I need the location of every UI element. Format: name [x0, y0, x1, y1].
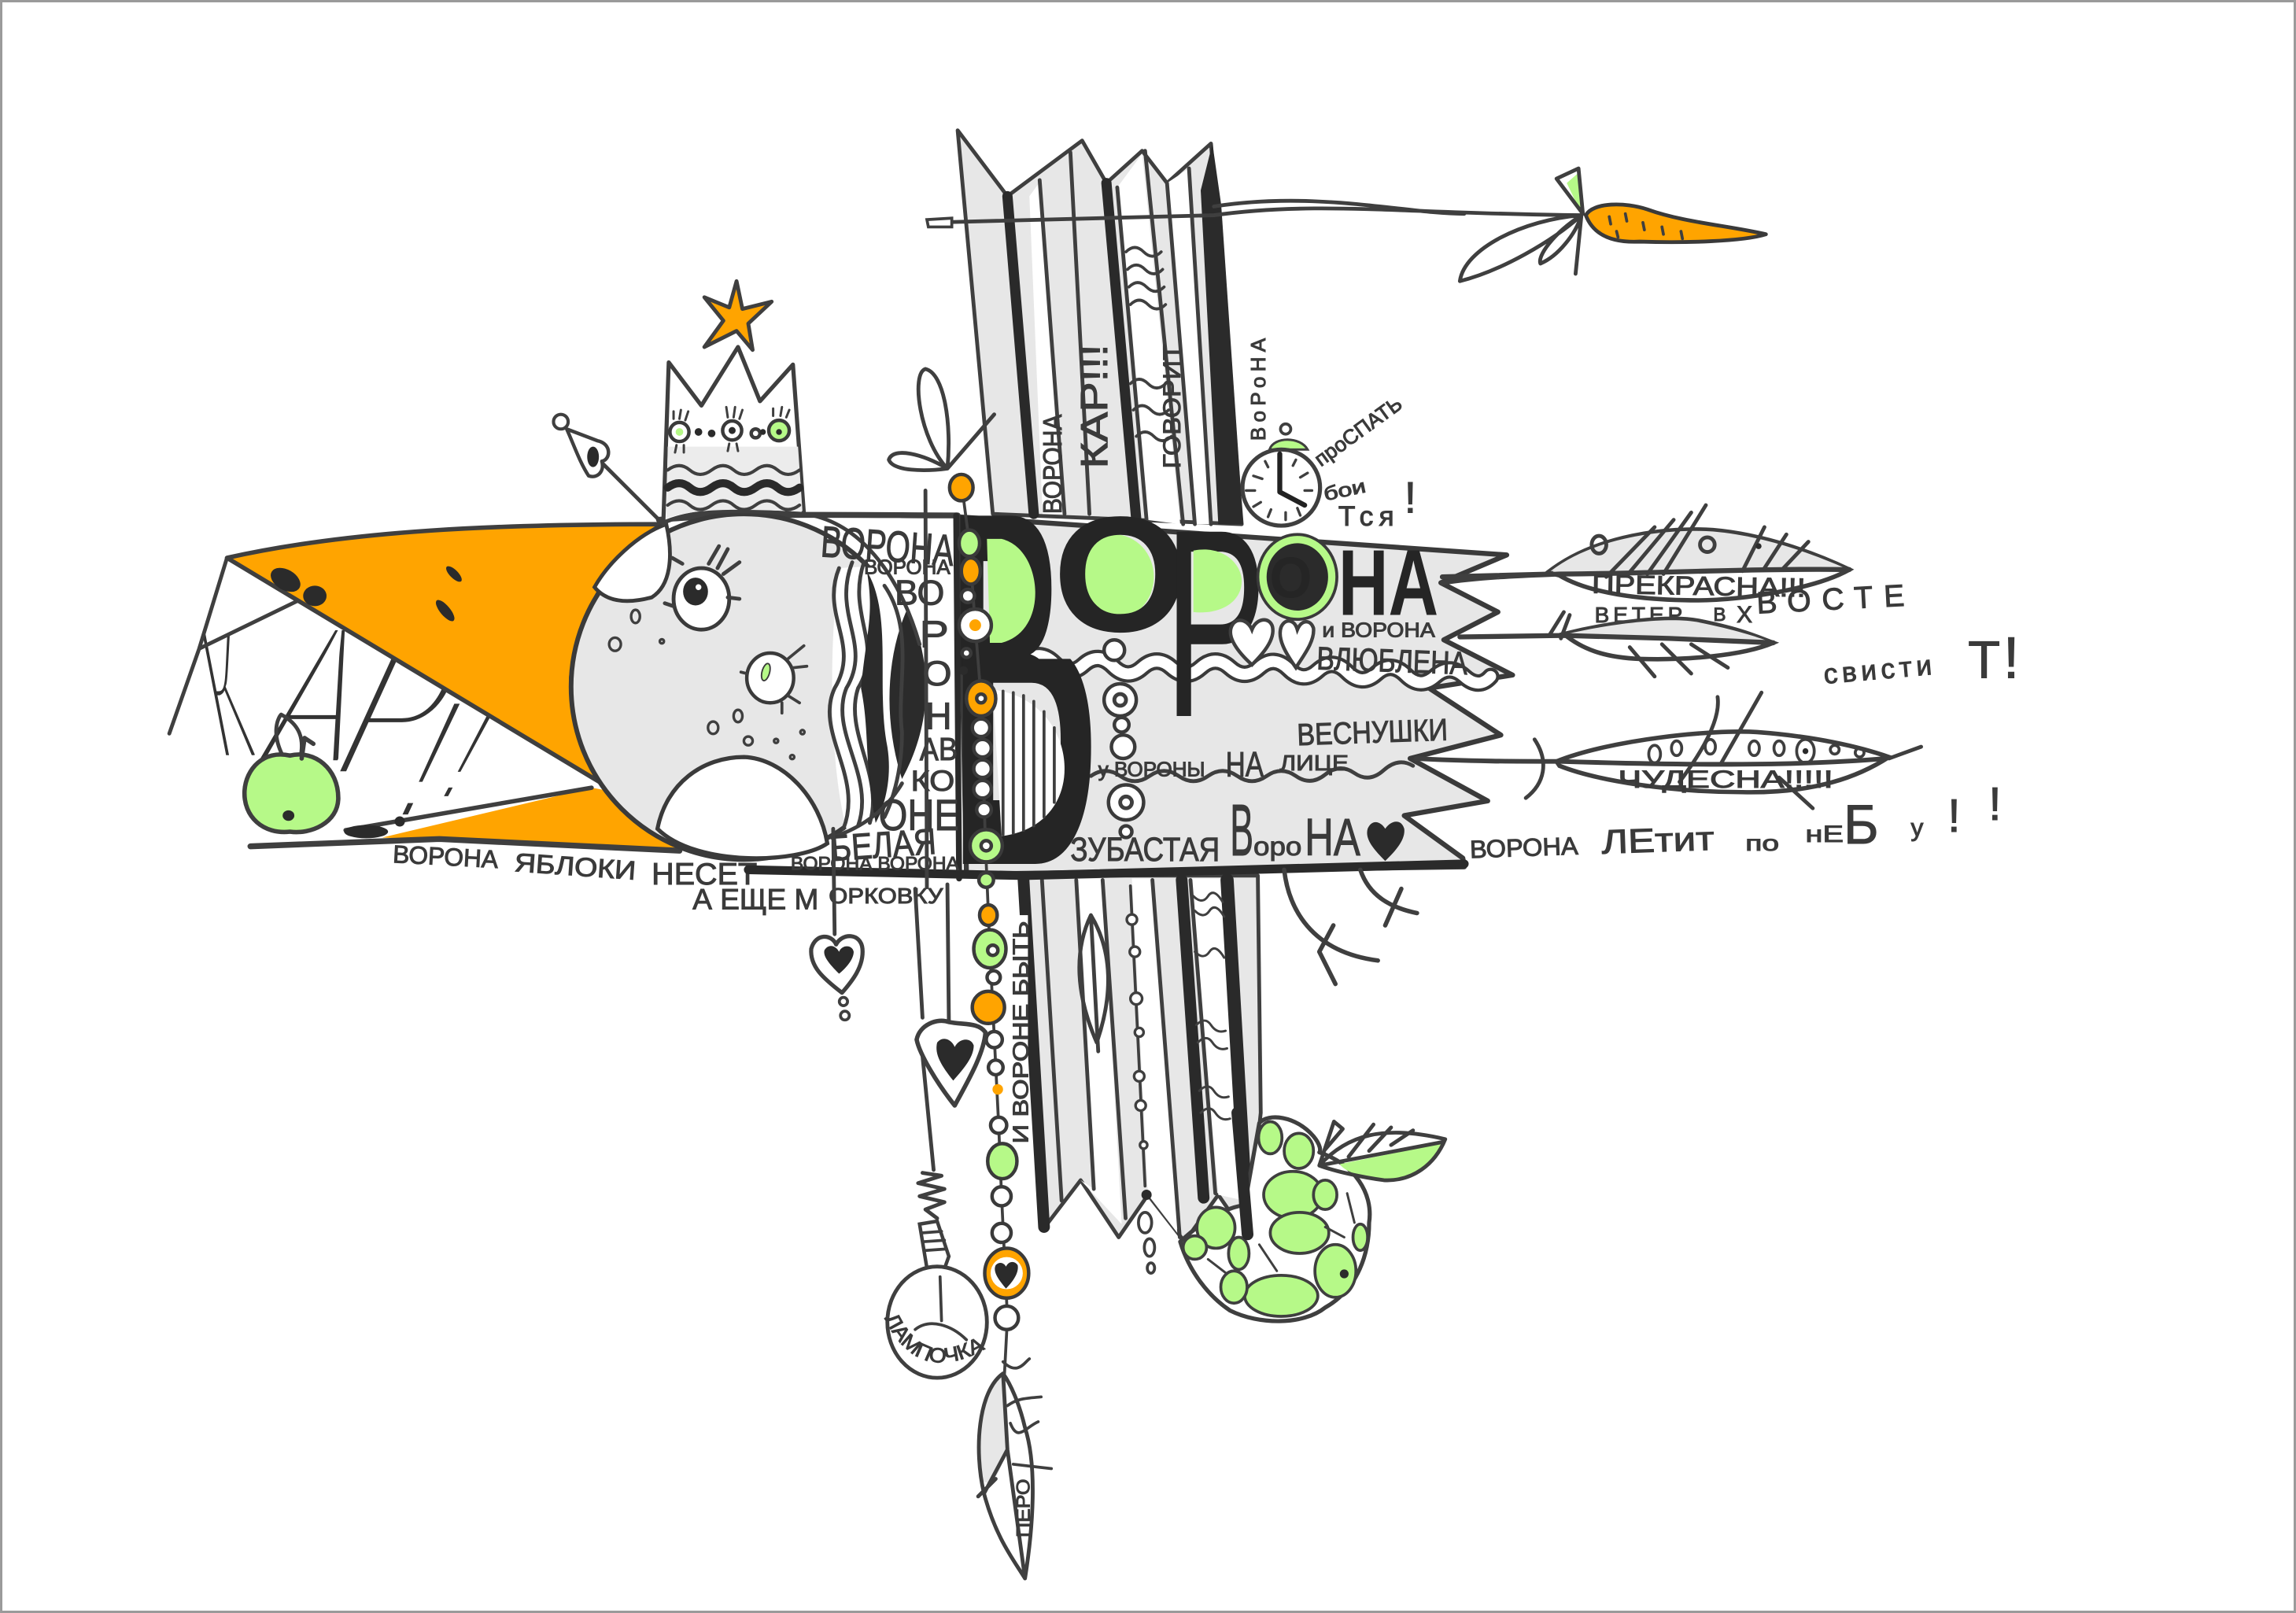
icon: wand with spade: [553, 415, 663, 524]
text: ВОРОНА ЛЕТИТ ПО НЕБУ: по: [1745, 831, 1779, 855]
caption: ВОРОНА ЯБЛОКИ НЕСЕТ: НЕСЕТ: [652, 858, 757, 891]
beak-mouth word КАР: !: [422, 684, 515, 825]
text: ВО: ВО: [895, 574, 944, 613]
icon: hanging heart small: [811, 829, 862, 1020]
text: свистит!: свисти: [1822, 650, 1937, 690]
beads in banner: [1104, 640, 1143, 837]
text: ЧУДЕСНА: ЧУДЕСНА!!!!!: [1618, 765, 1833, 793]
beak-mouth word КАР: Р: [305, 611, 495, 815]
text: ЗУБАСТАЯ ВороНА: [1070, 789, 1360, 871]
text: ВЛЮБЛЕНА: ВЛЮБЛЕНА: [1316, 640, 1468, 681]
letters НА: НА: [1338, 531, 1438, 636]
text: АВ: АВ: [920, 731, 958, 767]
green counter of upper В bowl: [987, 539, 1035, 643]
icon: carrot: [1585, 205, 1766, 242]
text: БЕЛАЯ: БЕЛАЯ: [829, 821, 937, 869]
text: ВОРОНА large: ВОРОНА: [819, 516, 956, 575]
caption: А ЕЩЕ МОРКОВКУ: [692, 883, 943, 916]
chest stacked words: Н: [925, 696, 952, 738]
striped counter of lower В bowl: [993, 689, 1065, 836]
text: у ВОРОНЫ НА ЛИЦЕ: [1098, 745, 1349, 784]
upper beak: [227, 524, 663, 792]
caption: А ЕЩЕ МОРКОВКУ: ОРКОВКУ: [829, 884, 943, 908]
mouth web lines: [169, 558, 301, 733]
icon: two hearts: [1231, 620, 1313, 668]
text: ВОРОНА on feather: ВОРОНА: [1039, 414, 1068, 514]
text: ОНЕ: ОНЕ: [879, 790, 959, 840]
text: ВОРОНА ЛЕТИТ ПО НЕБУ: ВОРОНА: [1469, 832, 1579, 864]
text: ВОРОНА ЛЕТИТ ПО НЕБУ: Б: [1844, 793, 1879, 855]
right feather two: [1460, 612, 1774, 677]
head white patch bottom: [658, 757, 827, 858]
text: КО: КО: [911, 764, 954, 797]
big letter В lower part: В: [949, 326, 1101, 991]
text: ВоРоНА vertical: ВоРоНА: [1246, 334, 1270, 441]
text: ВЕТЕР В ХВОСТЕ: ВЕТЕР: [1595, 603, 1682, 627]
crown: [663, 347, 804, 522]
caption: ВОРОНА ЯБЛОКИ НЕСЕТ: [392, 840, 757, 891]
white wavy band: [1025, 655, 1490, 683]
text: тся!: [1338, 472, 1416, 532]
text: у ВОРОНЫ НА ЛИЦЕ: НА: [1226, 745, 1264, 784]
text: ВОРОНА ЛЕТИТ ПО НЕБУ: у: [1911, 814, 1924, 842]
text: ВЕСНУШКИ: ВЕСНУШКИ: [1297, 714, 1449, 752]
text: ВОРОНА ЛЕТИТ ПО НЕБУ: !: [1988, 777, 2002, 830]
thin wave in banner: [1091, 762, 1413, 781]
freckles: [609, 610, 804, 759]
text: ВЕТЕР В ХВОСТЕ: [1595, 579, 1905, 628]
main serrated banner body: [959, 517, 1512, 874]
icon: hanging string to carrot: [927, 168, 1766, 281]
big letter В upper part: В: [950, 423, 1065, 899]
chest panel background: [659, 515, 961, 876]
text: ВОРОНА ЛЕТИТ ПО НЕБУ: !: [1947, 789, 1961, 842]
striped gill: [813, 515, 937, 837]
text: свистит!: Т: [1968, 631, 2000, 690]
text: ПРЕКРАСНА: ПРЕКРАСНА!!!: [1592, 570, 1806, 603]
icon: small feather on wing: [1080, 915, 1108, 1051]
icon: small eye: [741, 646, 807, 713]
text: ВОРОНА ЛЕТИТ ПО НЕБУ: нЕ: [1806, 821, 1844, 847]
text: ВОРОНА ЛЕТИТ ПО НЕБУ: [1469, 777, 2002, 864]
letter Р with green bowl: Р: [1164, 474, 1267, 773]
caption: А ЕЩЕ МОРКОВКУ: А ЕЩЕ М: [692, 883, 818, 916]
text: ЗУБАСТАЯ ВороНА: ЗУБАСТАЯ: [1070, 831, 1220, 869]
legs: [1284, 869, 1417, 984]
text: stacked letters Р О Н: Р: [920, 614, 949, 656]
beak-mouth word КАР: !: [376, 665, 487, 853]
lower wing feathers: [1022, 876, 1261, 1273]
text: ЗУБАСТАЯ ВороНА: В: [1230, 789, 1253, 871]
text: ВОРОНА ЛЕТИТ ПО НЕБУ: ЛЕтит: [1601, 820, 1715, 862]
text: ВОРОНА ВОРОНА: ВОРОНА ВОРОНА: [791, 853, 960, 874]
beak lumps and nostrils: [267, 563, 464, 624]
right feather one: [1442, 505, 1849, 603]
text: свистит!: [1822, 626, 2019, 691]
head white highlight top: [595, 524, 670, 601]
chest stacked words: [791, 516, 960, 874]
text: и ВОРОНА: и ВОРОНА: [1322, 618, 1435, 642]
text: бои: бои: [1322, 476, 1368, 505]
text: ВЕТЕР В ХВОСТЕ: Х: [1737, 602, 1752, 628]
text: свистит!: !: [2003, 626, 2019, 691]
icon: hanging heart large: [915, 884, 985, 1105]
text: ВЕТЕР В ХВОСТЕ: ВОСТЕ: [1755, 579, 1905, 621]
right feather three: [1416, 692, 1921, 808]
text: тся!: Тся: [1338, 501, 1394, 532]
icon: apple of apples: [1180, 1113, 1445, 1321]
text: И ВОРОНЕ БЫТЬ: И ВОРОНЕ БЫТЬ: [1008, 921, 1032, 1143]
letter О black with green ring: О: [1269, 545, 1312, 611]
letter О black with green ring: [1258, 534, 1337, 619]
head circle: [571, 514, 917, 859]
beak-mouth word КАР: А: [238, 581, 401, 810]
crown eyes: [670, 407, 789, 452]
chain in wing: [1131, 886, 1145, 1186]
text: у ВОРОНЫ НА ЛИЦЕ: ЛИЦЕ: [1279, 751, 1349, 775]
text: у ВОРОНЫ НА ЛИЦЕ: у ВОРОНЫ: [1098, 757, 1205, 781]
icon: hanging feather: [978, 1359, 1051, 1578]
beak-mouth word КАР: К: [186, 589, 268, 801]
caption: ВОРОНА ЯБЛОКИ НЕСЕТ: ВОРОНА: [392, 840, 500, 873]
text: тся!: !: [1405, 472, 1416, 522]
text: ПЕРО: ПЕРО: [1013, 1479, 1034, 1537]
caption: ВОРОНА ЯБЛОКИ НЕСЕТ: ЯБЛОКИ: [514, 848, 637, 886]
icon: flower loops: [889, 369, 995, 888]
text: ВЕТЕР В ХВОСТЕ: В: [1713, 604, 1726, 626]
text: ГОВОРИТ on feather: ГОВОРИТ: [1157, 344, 1186, 468]
icon: orange star: [704, 281, 772, 350]
chest stacked words: О: [922, 655, 952, 693]
drops below wing: [1139, 1213, 1154, 1273]
text: ВОРОНА small: ВОРОНА: [864, 555, 951, 578]
icon: apple leaf: [1320, 1121, 1445, 1180]
text: КАР on feather: КАР!!!: [1073, 344, 1116, 468]
text: ЛАМПОЧКА: ЛАМПОЧКА: [884, 1314, 986, 1363]
text: ЗУБАСТАЯ ВороНА: оро: [1253, 832, 1301, 862]
letter О with green centre: О: [1053, 482, 1188, 666]
icon: big eye: [665, 546, 740, 629]
text: проспать: проСПАТЬ: [1309, 392, 1407, 471]
strong lines of body: [748, 515, 1464, 879]
upper wing feathers: [958, 131, 1243, 524]
text: ЗУБАСТАЯ ВороНА: НА: [1305, 808, 1360, 867]
icon: light bulb on string: [884, 1057, 989, 1380]
bead chain: [950, 474, 1028, 1374]
icon: black heart: [1367, 821, 1405, 861]
icon: green apple: [245, 714, 338, 832]
icon: carrot leaves: [1460, 216, 1582, 281]
beak-mouth word КАР: [186, 581, 515, 853]
icon: alarm clock: [1242, 424, 1320, 526]
lower beak: [250, 788, 680, 851]
